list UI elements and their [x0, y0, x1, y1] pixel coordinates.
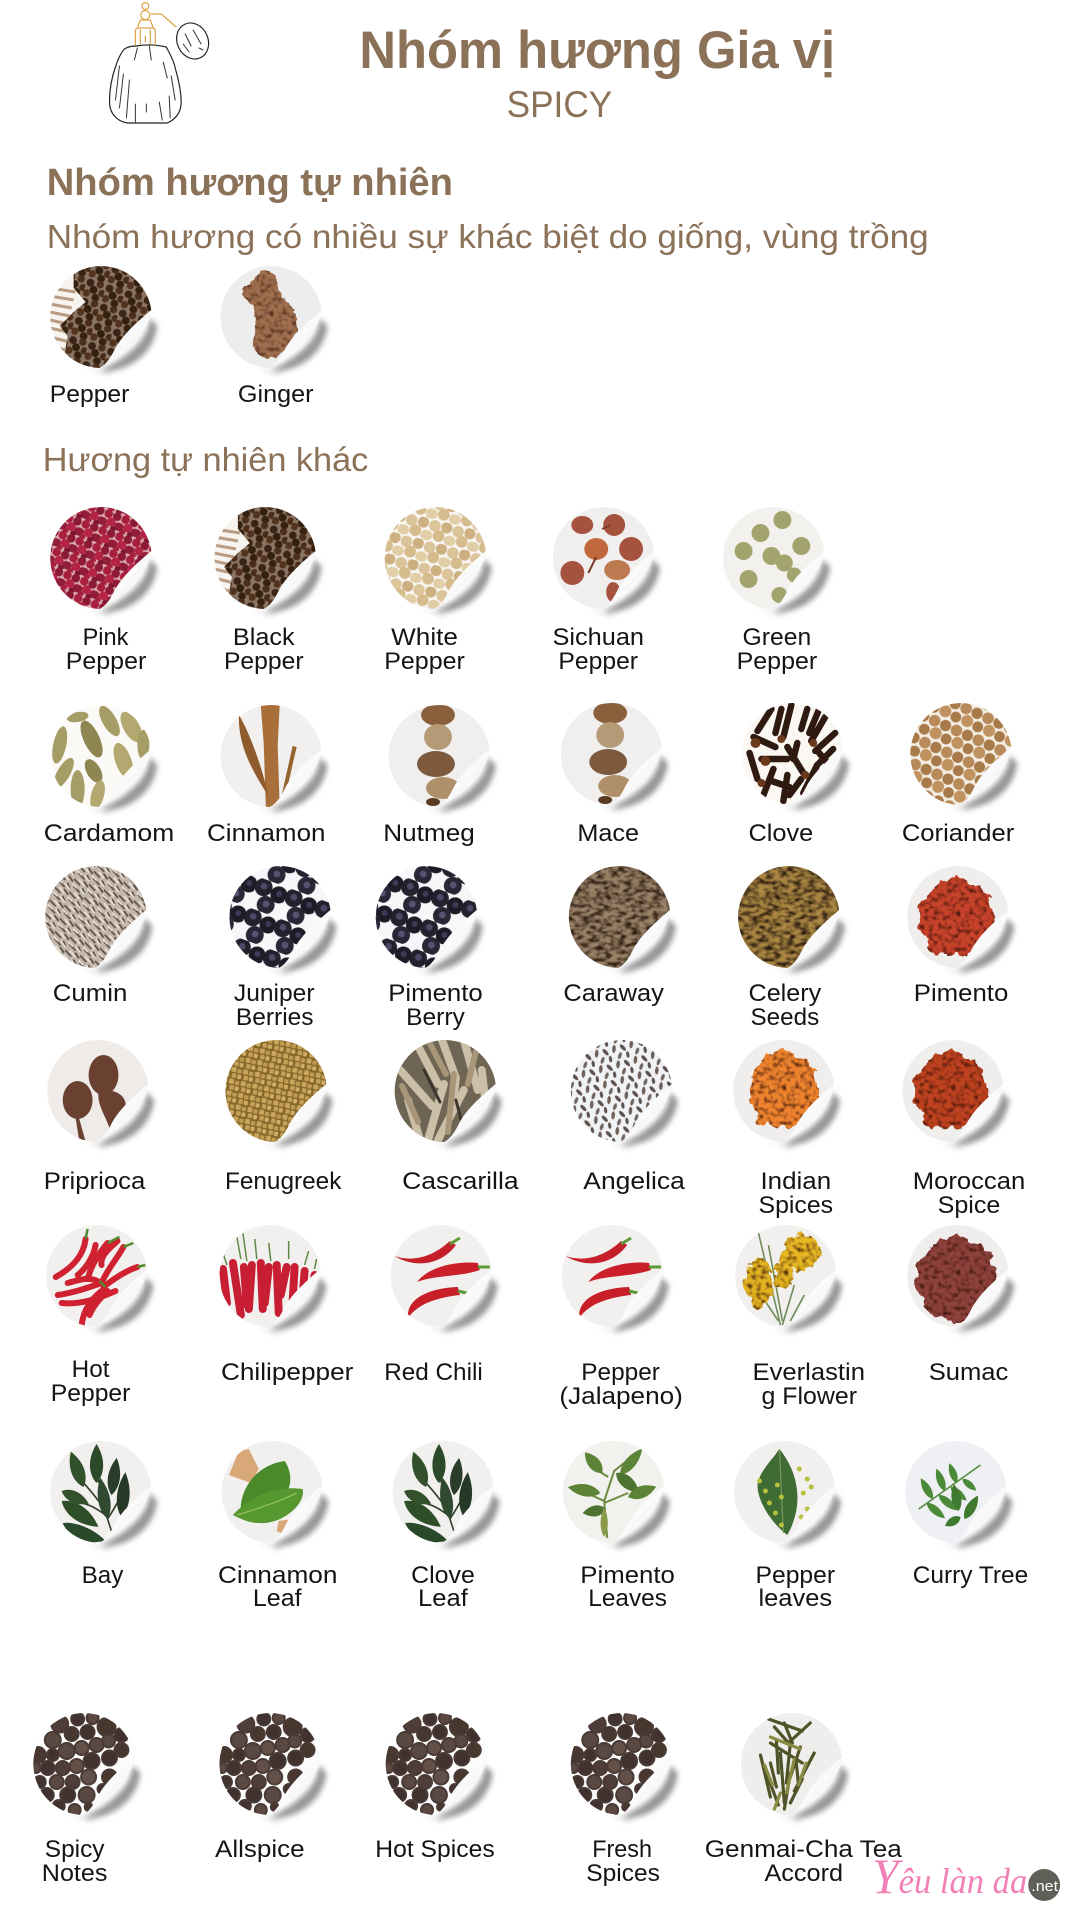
- item: White Pepper: Pepper: [384, 648, 465, 675]
- item: Fenugreek: [225, 1040, 341, 1195]
- item: Pink Pepper: [50, 507, 157, 675]
- item: Pimento Leaves: Pimento: [580, 1562, 675, 1589]
- item: Green Pepper: [723, 507, 830, 675]
- item: Pepper (Jalapeno): Pepper: [581, 1359, 660, 1386]
- heading: other natural notes: Hương tự nhiên khác: [43, 441, 368, 478]
- item: Juniper Berries: Juniper: [234, 980, 315, 1007]
- heading: natural group: Nhóm hương tự nhiên: [47, 162, 453, 204]
- item: Hot Pepper: Hot: [72, 1356, 110, 1383]
- item: Cumin: [45, 866, 152, 1007]
- item: Moroccan Spice: Moroccan: [913, 1168, 1025, 1195]
- item: Sichuan Pepper: Sichuan: [552, 624, 644, 651]
- item: Pimento: Pimento: [914, 980, 1008, 1007]
- item: Black Pepper: Black: [233, 624, 295, 651]
- item: Chilipepper: Chilipepper: [221, 1359, 353, 1386]
- item: Pimento Berry: [375, 866, 483, 1031]
- item: Mace: Mace: [577, 820, 639, 847]
- item: Clove Leaf: Clove: [411, 1562, 475, 1589]
- item: Sichuan Pepper: Pepper: [558, 648, 638, 675]
- item: Pepper (Jalapeno): [559, 1225, 683, 1410]
- item: Cardamom: [44, 703, 174, 847]
- item: Fresh Spices: Fresh: [592, 1836, 652, 1863]
- item: Spicy Notes: [30, 1712, 140, 1887]
- item: Priprioca: [44, 1040, 154, 1195]
- item: Moroccan Spice: [902, 1040, 1025, 1219]
- item: Clove: Clove: [749, 820, 813, 847]
- item: Pepper: [50, 266, 157, 408]
- item: Genmai-Cha Tea Accord: Genmai-Cha Tea: [705, 1836, 903, 1863]
- item: Everlasting Flower: [735, 1225, 865, 1410]
- text block: description: Nhóm hương có nhiều sự khác biệt do giống, vùng trồng: [47, 218, 929, 255]
- item: Pepper leaves: Pepper: [756, 1562, 835, 1589]
- item: Caraway: Caraway: [563, 980, 664, 1007]
- item: Pimento Berry: Pimento: [388, 980, 483, 1007]
- item: Caraway: [563, 866, 676, 1007]
- item: Black Pepper: [214, 507, 322, 675]
- item: Green Pepper: Green: [743, 624, 811, 651]
- item: Cinnamon Leaf: Leaf: [253, 1585, 302, 1612]
- item: Nutmeg: [383, 704, 496, 847]
- item: Cascarilla: Cascarilla: [402, 1168, 519, 1195]
- watermark: Yêu làn da .net: .net: [1031, 1878, 1059, 1895]
- item: Moroccan Spice: Spice: [938, 1192, 1000, 1219]
- item: Pimento: [907, 866, 1014, 1007]
- watermark: Yêu làn da .net: Yêu làn da: [872, 1849, 1027, 1904]
- item: Clove Leaf: [392, 1441, 500, 1612]
- item: Clove: [742, 703, 849, 847]
- title: Nhóm hương Gia vị: [359, 21, 835, 80]
- item: Curry Tree: Curry Tree: [913, 1562, 1028, 1589]
- item: Cinnamon: [207, 705, 327, 847]
- item: White Pepper: [384, 507, 492, 675]
- item: Pepper leaves: [734, 1441, 841, 1612]
- item: Bay: [50, 1441, 157, 1589]
- item: Indian Spices: Spices: [758, 1192, 833, 1219]
- item: Juniper Berries: Berries: [236, 1004, 314, 1031]
- icon: perfume bottle: [109, 3, 214, 123]
- item: Everlasting Flower: Everlastin: [753, 1359, 865, 1386]
- item: Bay: Bay: [82, 1562, 123, 1589]
- item: Coriander: [902, 703, 1017, 847]
- item: Curry Tree: [905, 1441, 1028, 1589]
- item: Fresh Spices: [567, 1712, 678, 1887]
- item: Celery Seeds: Celery: [749, 980, 821, 1007]
- item: Black Pepper: Pepper: [224, 648, 304, 675]
- item: Pepper leaves: leaves: [758, 1585, 832, 1612]
- item: Pimento Leaves: Leaves: [588, 1585, 667, 1612]
- item: Hot Pepper: Pepper: [51, 1380, 130, 1407]
- item: Indian Spices: [733, 1040, 840, 1219]
- item: Cinnamon Leaf: [218, 1441, 337, 1612]
- item: Hot Spices: Hot Spices: [375, 1836, 495, 1863]
- item: Sumac: Sumac: [929, 1359, 1008, 1386]
- item: Clove Leaf: Leaf: [418, 1585, 468, 1612]
- item: Cascarilla: [394, 1040, 519, 1195]
- item: Hot Pepper: [46, 1225, 153, 1407]
- item: Genmai-Cha Tea Accord: Accord: [764, 1860, 843, 1887]
- item: Fresh Spices: Spices: [586, 1860, 660, 1887]
- item: Celery Seeds: [738, 866, 845, 1031]
- item: White Pepper: White: [391, 624, 458, 651]
- item: Angelica: Angelica: [583, 1168, 686, 1195]
- item: Mace: [560, 702, 668, 847]
- item: Sumac: [907, 1225, 1014, 1386]
- item: Spicy Notes: Notes: [42, 1860, 108, 1887]
- item: Pimento Leaves: [562, 1441, 675, 1612]
- item: Ginger: Ginger: [238, 381, 314, 408]
- item: Cinnamon Leaf: Cinnamon: [218, 1562, 337, 1589]
- item: Pepper: Pepper: [50, 381, 129, 408]
- item: Genmai-Cha Tea Accord: [705, 1713, 903, 1887]
- item: Chilipepper: [219, 1225, 353, 1386]
- item: Red Chili: [384, 1225, 498, 1386]
- item: Red Chili: Red Chili: [384, 1359, 483, 1386]
- item: Cumin: Cumin: [53, 980, 127, 1007]
- item: Sichuan Pepper: [552, 507, 660, 675]
- item: Everlasting Flower: g Flower: [761, 1383, 857, 1410]
- item: Pepper (Jalapeno): (Jalapeno): [559, 1383, 683, 1410]
- item: Juniper Berries: [229, 866, 336, 1031]
- item: Indian Spices: Indian: [760, 1168, 831, 1195]
- item: Coriander: Coriander: [902, 820, 1014, 847]
- item: Celery Seeds: Seeds: [751, 1004, 819, 1031]
- item: Cardamom: Cardamom: [44, 820, 174, 847]
- item: Priprioca: Priprioca: [44, 1168, 146, 1195]
- item: Green Pepper: Pepper: [737, 648, 817, 675]
- item: Fenugreek: Fenugreek: [225, 1168, 341, 1195]
- item: Nutmeg: Nutmeg: [383, 820, 475, 847]
- item: Allspice: Allspice: [215, 1836, 305, 1863]
- item: Pimento Berry: Berry: [406, 1004, 465, 1031]
- item: Ginger: [220, 266, 327, 408]
- item: Allspice: [215, 1712, 326, 1863]
- item: Hot Spices: [375, 1712, 495, 1863]
- item: Angelica: [570, 1040, 686, 1195]
- item: Pink Pepper: Pink: [83, 624, 128, 651]
- item: Spicy Notes: Spicy: [45, 1836, 105, 1863]
- item: Cinnamon: Cinnamon: [207, 820, 325, 847]
- item: Pink Pepper: Pepper: [66, 648, 146, 675]
- subtitle: SPICY: SPICY: [507, 84, 612, 125]
